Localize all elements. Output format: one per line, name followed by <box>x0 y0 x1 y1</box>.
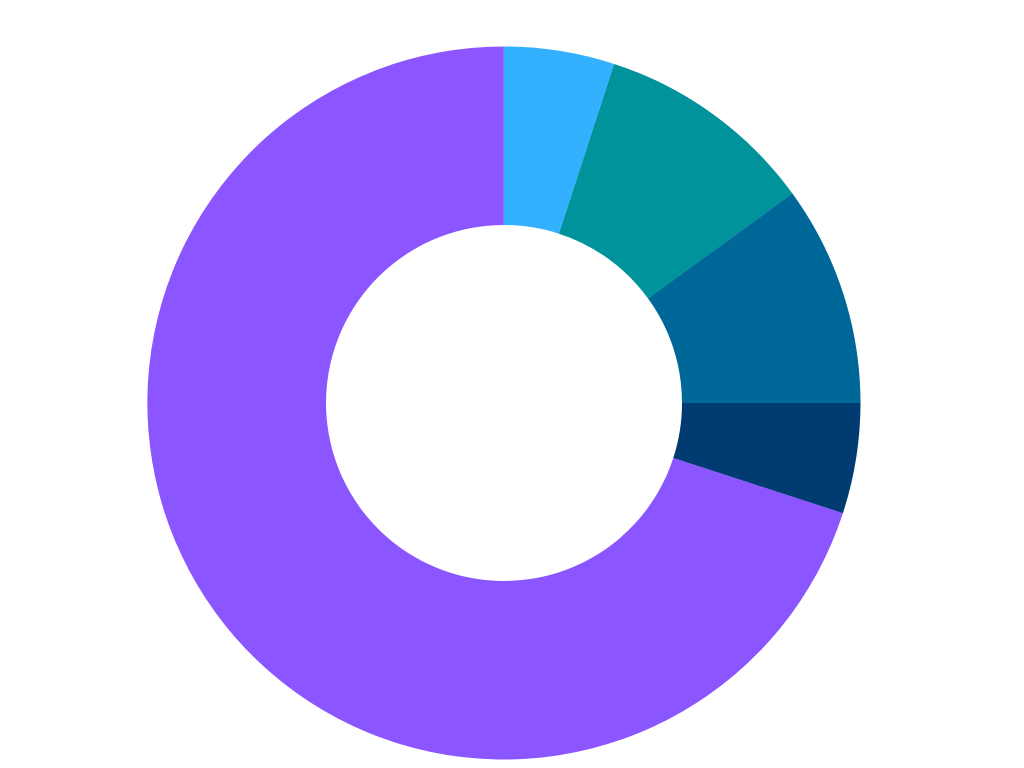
segment: navy <box>673 403 860 513</box>
segment: teal <box>559 64 792 298</box>
segment: purple <box>147 46 843 759</box>
segment: light blue <box>504 46 614 234</box>
segment: blue <box>648 194 860 403</box>
